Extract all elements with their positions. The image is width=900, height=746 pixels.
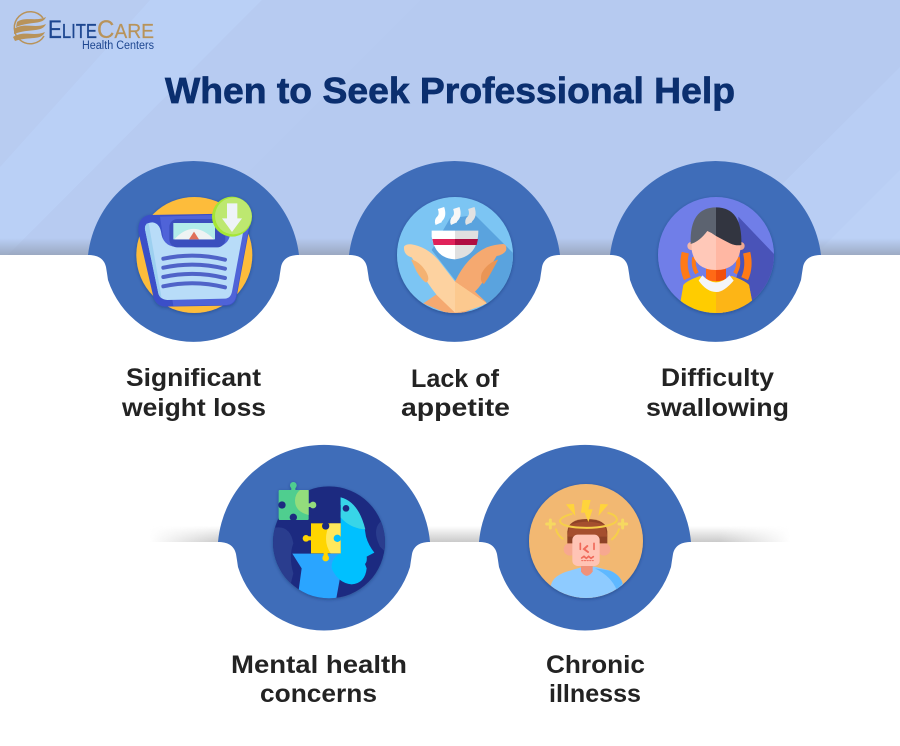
label: lack of appetite: appetite — [401, 394, 510, 422]
logo: EliteCare Health Centers — [13, 12, 154, 52]
label: chronic illness: illnesss — [549, 680, 641, 708]
label: mental health concerns: Mental health — [231, 651, 407, 679]
medallion: chronic illness — [479, 445, 691, 630]
label: mental health concerns: concerns — [260, 680, 377, 708]
logo tagline: Health Centers — [82, 40, 154, 52]
medallion: significant weight loss — [88, 161, 299, 342]
lower shadow band — [162, 528, 778, 542]
label: significant weight loss: Significant — [126, 364, 262, 392]
header background — [0, 0, 900, 255]
icon: bowl and crossed hands — [397, 197, 515, 317]
label: significant weight loss — [121, 364, 266, 422]
icon: logo emblem — [13, 12, 46, 44]
title: When to Seek Professional Help — [165, 70, 735, 111]
label: difficulty swallowing: swallowing — [646, 394, 789, 422]
medallion: mental health concerns — [218, 445, 430, 630]
icon: green puzzle piece — [278, 482, 316, 521]
icon: yellow puzzle piece — [303, 522, 341, 561]
label: difficulty swallowing: Difficulty — [661, 364, 774, 392]
icon: weighing scale — [136, 197, 252, 313]
label: chronic illness — [546, 651, 645, 708]
label: significant weight loss: weight loss — [121, 394, 266, 422]
medallion: lack of appetite — [349, 161, 560, 342]
label: lack of appetite — [401, 365, 510, 422]
label: lack of appetite: Lack of — [411, 365, 500, 393]
icon: dizzy person with headache — [529, 484, 643, 607]
logo wordmark: ELITE — [48, 16, 97, 44]
label: difficulty swallowing — [646, 364, 789, 422]
icon: head with puzzle pieces — [270, 482, 387, 600]
medallion: difficulty swallowing — [610, 161, 821, 342]
label: mental health concerns — [231, 651, 407, 708]
label: chronic illness: Chronic — [546, 651, 645, 679]
logo: EliteCare Health Centers: CARE — [97, 16, 154, 44]
icon: person with sore throat — [658, 197, 775, 317]
